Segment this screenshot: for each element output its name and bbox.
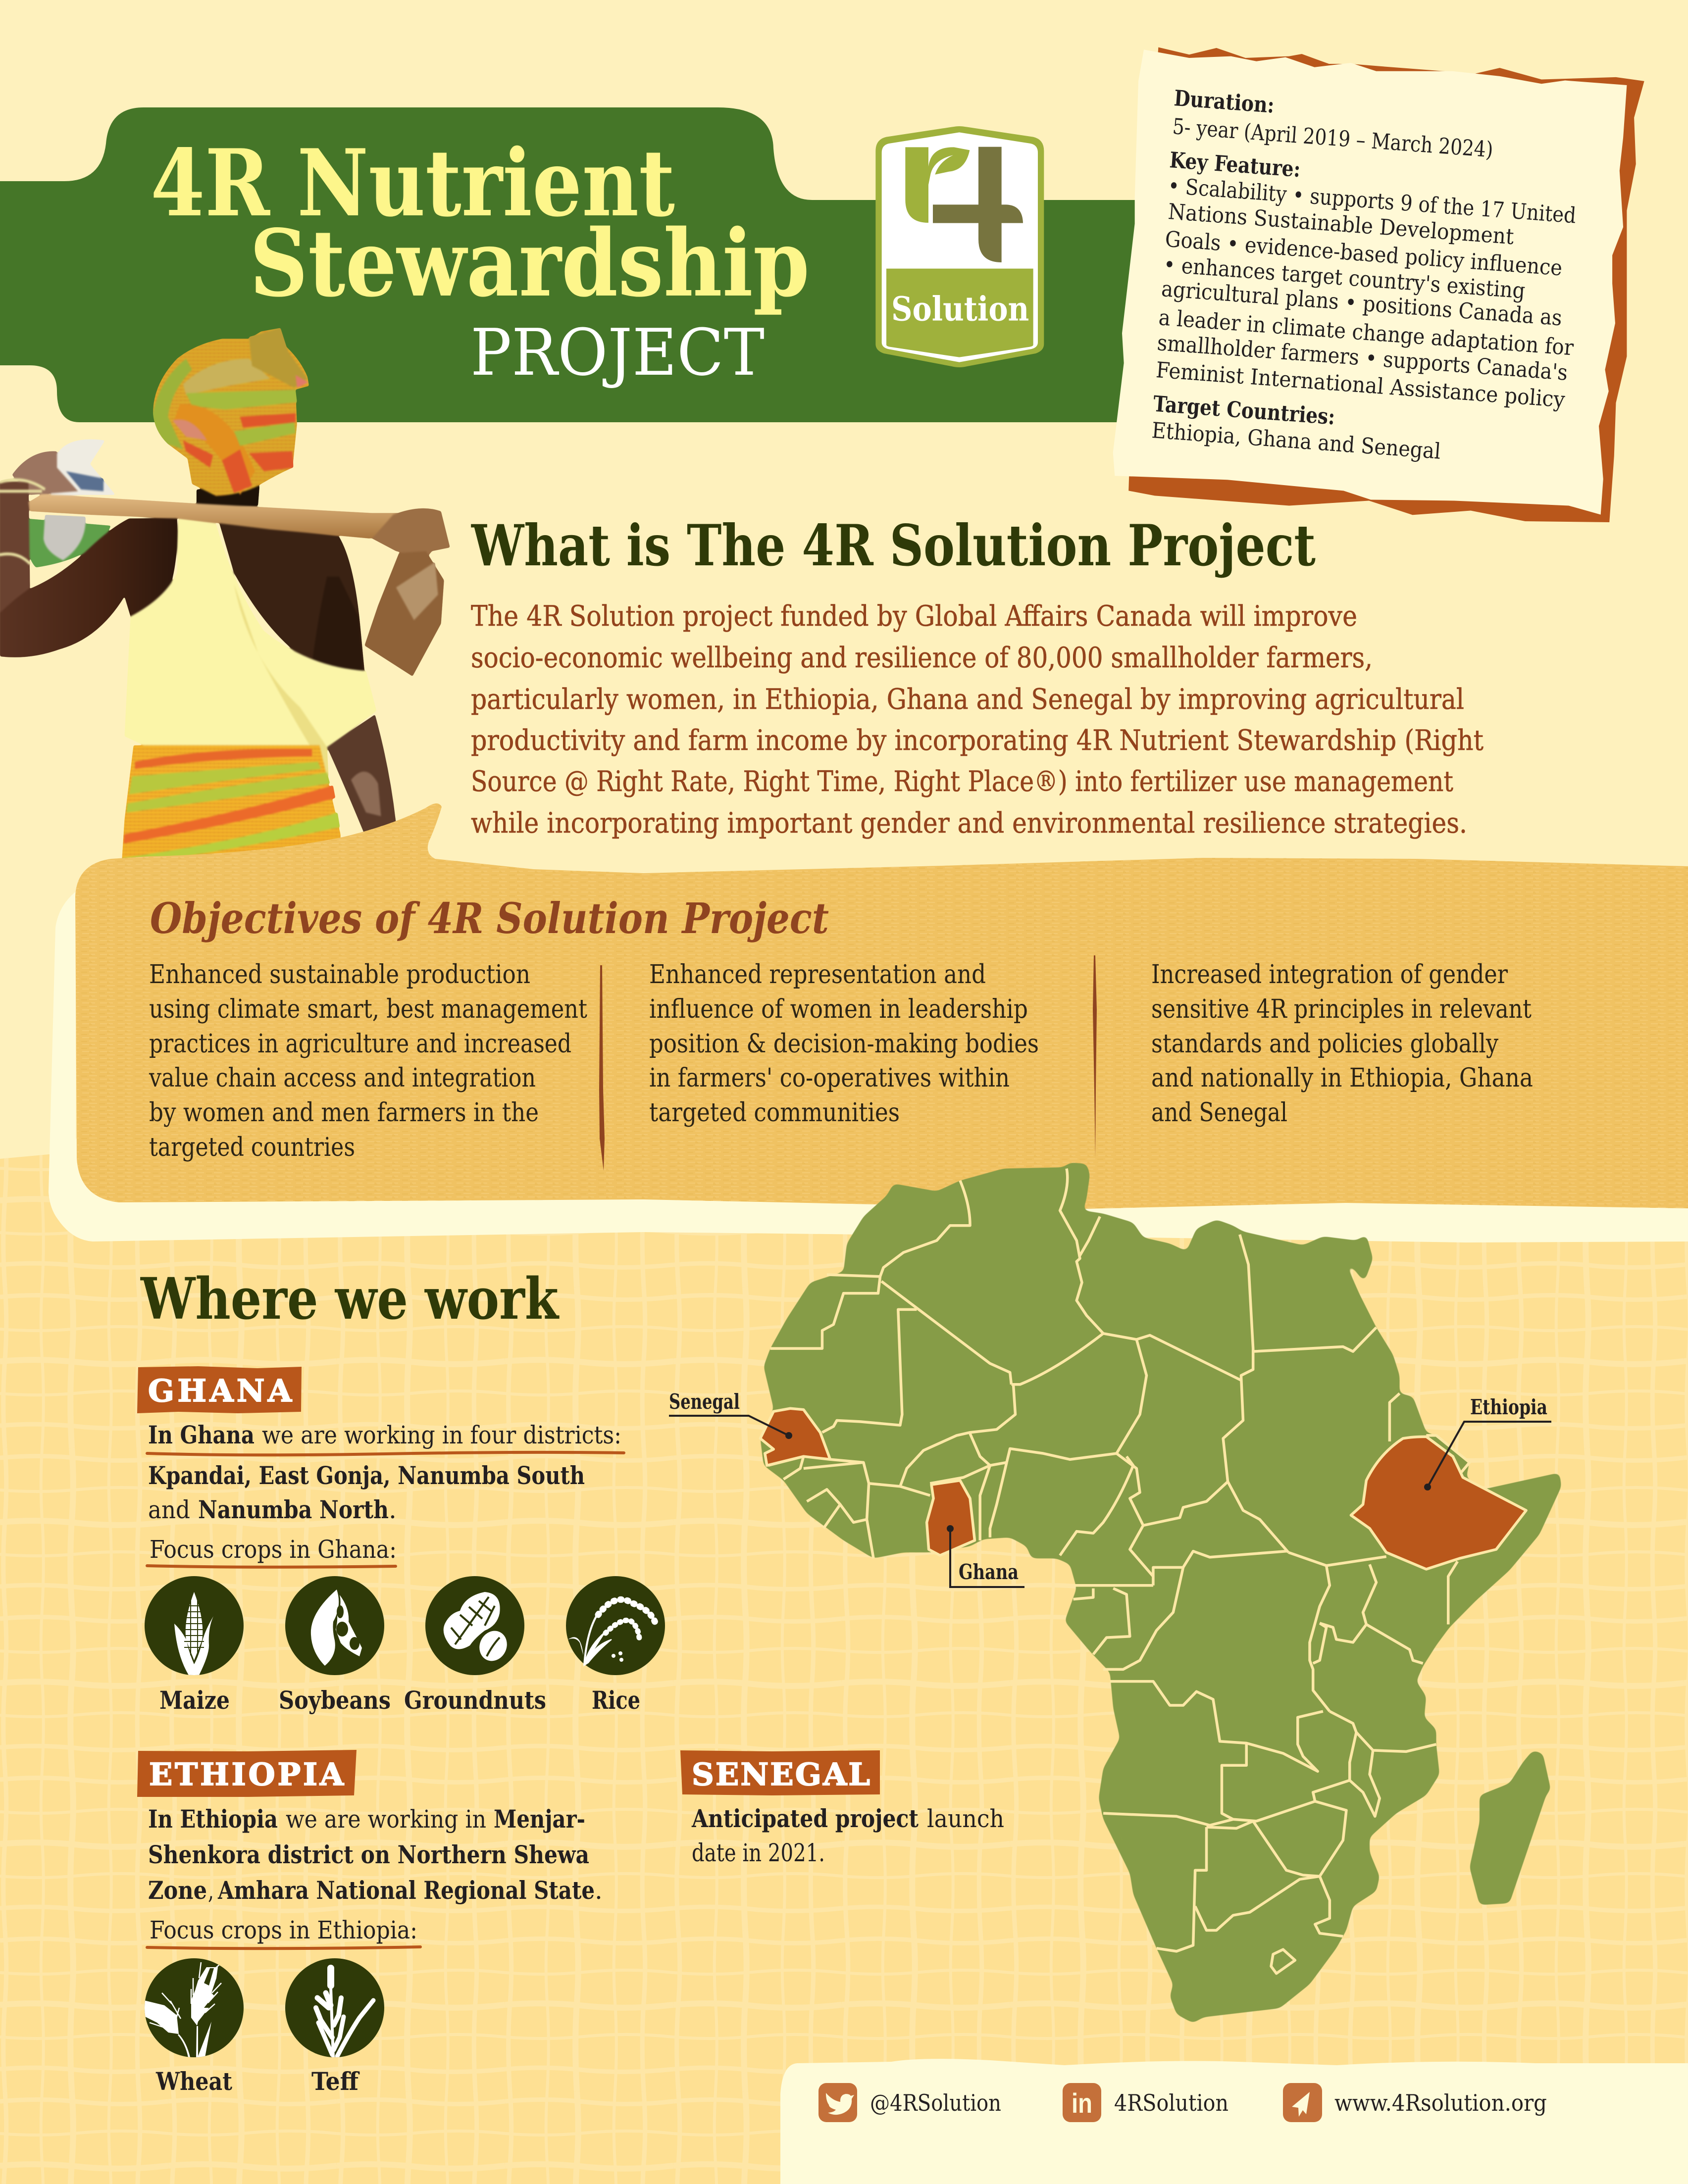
Senegal highlight (760, 1408, 830, 1465)
note text: Goals • evidence-based policy influence (1164, 227, 1563, 281)
Ethiopia district text: . (595, 1876, 603, 1905)
tag: Ghana (137, 1366, 302, 1413)
text: website: www.4Rsolution.org (1334, 2089, 1547, 2116)
note text: Nations Sustainable Development (1167, 199, 1515, 249)
project description: productivity and farm income by incorporating 4R Nutrient Stewardship (Right (471, 724, 1483, 757)
section: Ghana (137, 1366, 665, 1715)
project description: particularly women, in Ethiopia, Ghana and Senegal by improving agricultural (471, 683, 1464, 716)
Ethiopia focus crops label: Focus crops in Ethiopia: (150, 1916, 417, 1944)
divider 2 (1093, 955, 1097, 1158)
Ghana districts text (147, 1420, 624, 1524)
objective 3: and Senegal (1151, 1098, 1287, 1128)
objective 1: practices in agriculture and increased (149, 1029, 571, 1059)
note shadow edge (1128, 48, 1644, 522)
objective 3 (1151, 960, 1533, 1128)
note text: smallholder farmers • supports Canada's (1156, 330, 1569, 386)
crop labels: Ethiopia: Wheat (155, 2067, 232, 2096)
icon: soybeans (285, 1576, 384, 1675)
text: twitter handle: @4RSolution (870, 2089, 1001, 2116)
objective 3: Increased integration of gender (1151, 960, 1508, 990)
objective 2: Enhanced representation and (649, 960, 986, 990)
Ethiopia district text: In Ethiopia (148, 1804, 278, 1834)
map callout: Ethiopia: Ethiopia (1470, 1395, 1547, 1419)
panel canvas texture (75, 803, 1688, 1209)
Ghana focus crops label: Focus crops in Ghana: (150, 1535, 397, 1564)
Ghana districts text: Kpandai, East Gonja, Nanumba South (148, 1461, 585, 1490)
heading: what is the project: What is The 4R Solution Project (471, 512, 1316, 579)
note text: agricultural plans • positions Canada as (1161, 276, 1563, 331)
text: linkedin handle: 4RSolution (1114, 2089, 1228, 2116)
Ethiopia highlight (1351, 1437, 1526, 1569)
footer panel (780, 2059, 1688, 2184)
divider 1 (599, 965, 605, 1171)
map callout: Senegal: Senegal (669, 1390, 740, 1414)
title (151, 129, 810, 390)
icon: wheat (142, 1958, 244, 2057)
panel: objectives (75, 803, 1688, 1209)
map callout: Ethiopia (1424, 1395, 1551, 1490)
crop labels: Ghana: Maize (159, 1686, 230, 1715)
objective 2 (649, 960, 1039, 1128)
Ethiopia district text: Menjar- (494, 1804, 585, 1834)
objective 2: position & decision-making bodies (649, 1029, 1039, 1059)
woven texture lower background (0, 1154, 1688, 2184)
Ghana districts text: . (389, 1495, 397, 1524)
objective 2: targeted communities (649, 1098, 900, 1128)
objective 1: targeted countries (149, 1133, 355, 1162)
icon: linkedin: in (1072, 2087, 1092, 2119)
tag: Ghana: GHANA (148, 1373, 292, 1409)
Ghana districts text: and (148, 1495, 190, 1524)
objective 3: sensitive 4R principles in relevant (1151, 994, 1532, 1024)
Ethiopia district text: , (208, 1876, 214, 1905)
note text: Target Countries: (1152, 392, 1336, 430)
key facts paper note (1113, 48, 1644, 522)
section: Ethiopia (137, 1750, 603, 2096)
map callout: Ghana (947, 1525, 1024, 1587)
Senegal text: date in 2021. (692, 1838, 825, 1867)
heading: where we work: Where we work (140, 1266, 560, 1333)
tag: Ethiopia (137, 1750, 357, 1797)
note text: Duration: (1173, 86, 1275, 118)
crop labels: Ghana (159, 1686, 640, 1715)
Madagascar (1470, 1750, 1551, 1905)
Ethiopia district text: Zone (148, 1876, 207, 1905)
note text: Feminist International Assistance policy (1155, 357, 1566, 413)
note paper (1113, 50, 1627, 515)
icon: rice (566, 1576, 665, 1675)
map callout: Ghana: Ghana (959, 1560, 1019, 1584)
icon: linkedin (1063, 2083, 1101, 2122)
Ethiopia district text: Amhara National Regional State (217, 1876, 595, 1905)
objective 2: in farmers' co-operatives within (649, 1063, 1010, 1093)
Ethiopia district text: Shenkora district on Northern Shewa (148, 1840, 589, 1869)
Ethiopia district text (148, 1804, 603, 1905)
note text: Key Feature: (1169, 148, 1301, 182)
objective 1: using climate smart, best management (149, 994, 587, 1024)
project description (471, 600, 1483, 840)
note text: • enhances target country's existing (1163, 252, 1526, 304)
Ghana districts text: In Ghana (148, 1420, 255, 1449)
heading: objectives: Objectives of 4R Solution Project (150, 894, 829, 943)
logo: 4R Solution shield (875, 126, 1044, 367)
note text: Ethiopia, Ghana and Senegal (1151, 418, 1441, 464)
title: Stewardship (250, 209, 810, 317)
cream band behind objectives (49, 892, 1688, 1242)
Senegal text (691, 1804, 1004, 1867)
icon: maize (145, 1576, 244, 1675)
note text: a leader in climate change adaptation for (1158, 305, 1575, 361)
Ethiopia district text: we are working in (286, 1805, 486, 1834)
objective 1 (149, 960, 587, 1162)
crop labels: Ethiopia (155, 2067, 360, 2096)
project description: while incorporating important gender and environmental resilience strategies. (471, 807, 1467, 840)
icon: teff (285, 1958, 384, 2057)
icon: twitter (818, 2083, 857, 2122)
tag: Senegal: SENEGAL (692, 1756, 870, 1792)
map of Africa with highlighted countries (760, 1162, 1561, 2023)
Ghana districts text: we are working in four districts: (262, 1421, 621, 1449)
objective 1: value chain access and integration (149, 1063, 536, 1093)
map callout: Senegal (669, 1390, 792, 1439)
project description: The 4R Solution project funded by Global Affairs Canada will improve (471, 600, 1357, 633)
objective 1: by women and men farmers in the (149, 1098, 539, 1128)
photo: woman farmer carrying a hoe (0, 328, 450, 866)
country borders (768, 1169, 1470, 1974)
crop labels: Ghana: Groundnuts (404, 1686, 546, 1715)
Ghana districts text: Nanumba North (198, 1495, 389, 1524)
panel background speech shape (75, 803, 1688, 1209)
project description: socio-economic wellbeing and resilience of 80,000 smallholder farmers, (471, 642, 1373, 674)
icon: groundnuts (425, 1576, 524, 1675)
Senegal text: launch (927, 1804, 1004, 1833)
green title banner (0, 107, 1149, 422)
tag: Ethiopia: ETHIOPIA (149, 1756, 344, 1792)
crop labels: Ghana: Soybeans (279, 1686, 391, 1715)
objective 2: influence of women in leadership (649, 994, 1028, 1024)
note text: • Scalability • supports 9 of the 17 United (1167, 173, 1577, 228)
logo: 4R Solution shield: Solution (891, 289, 1029, 328)
crop labels: Ghana: Rice (592, 1686, 640, 1715)
crop labels: Ethiopia: Teff (311, 2067, 360, 2096)
title: 4R Nutrient (151, 129, 675, 237)
Senegal text: Anticipated project (691, 1804, 919, 1833)
icon: website arrow (1283, 2083, 1322, 2122)
continent silhouette (760, 1162, 1561, 2023)
Ghana highlight (927, 1481, 974, 1555)
project description: Source @ Right Rate, Right Time, Right Place®) into fertilizer use management (471, 765, 1453, 798)
objective 3: and nationally in Ethiopia, Ghana (1151, 1063, 1533, 1093)
section: Senegal (680, 1750, 1004, 1867)
note text (1151, 86, 1577, 464)
objective 1: Enhanced sustainable production (149, 960, 530, 990)
objective 3: standards and policies globally (1151, 1029, 1499, 1059)
title: PROJECT (470, 315, 765, 390)
note text: 5- year (April 2019 – March 2024) (1172, 114, 1494, 163)
